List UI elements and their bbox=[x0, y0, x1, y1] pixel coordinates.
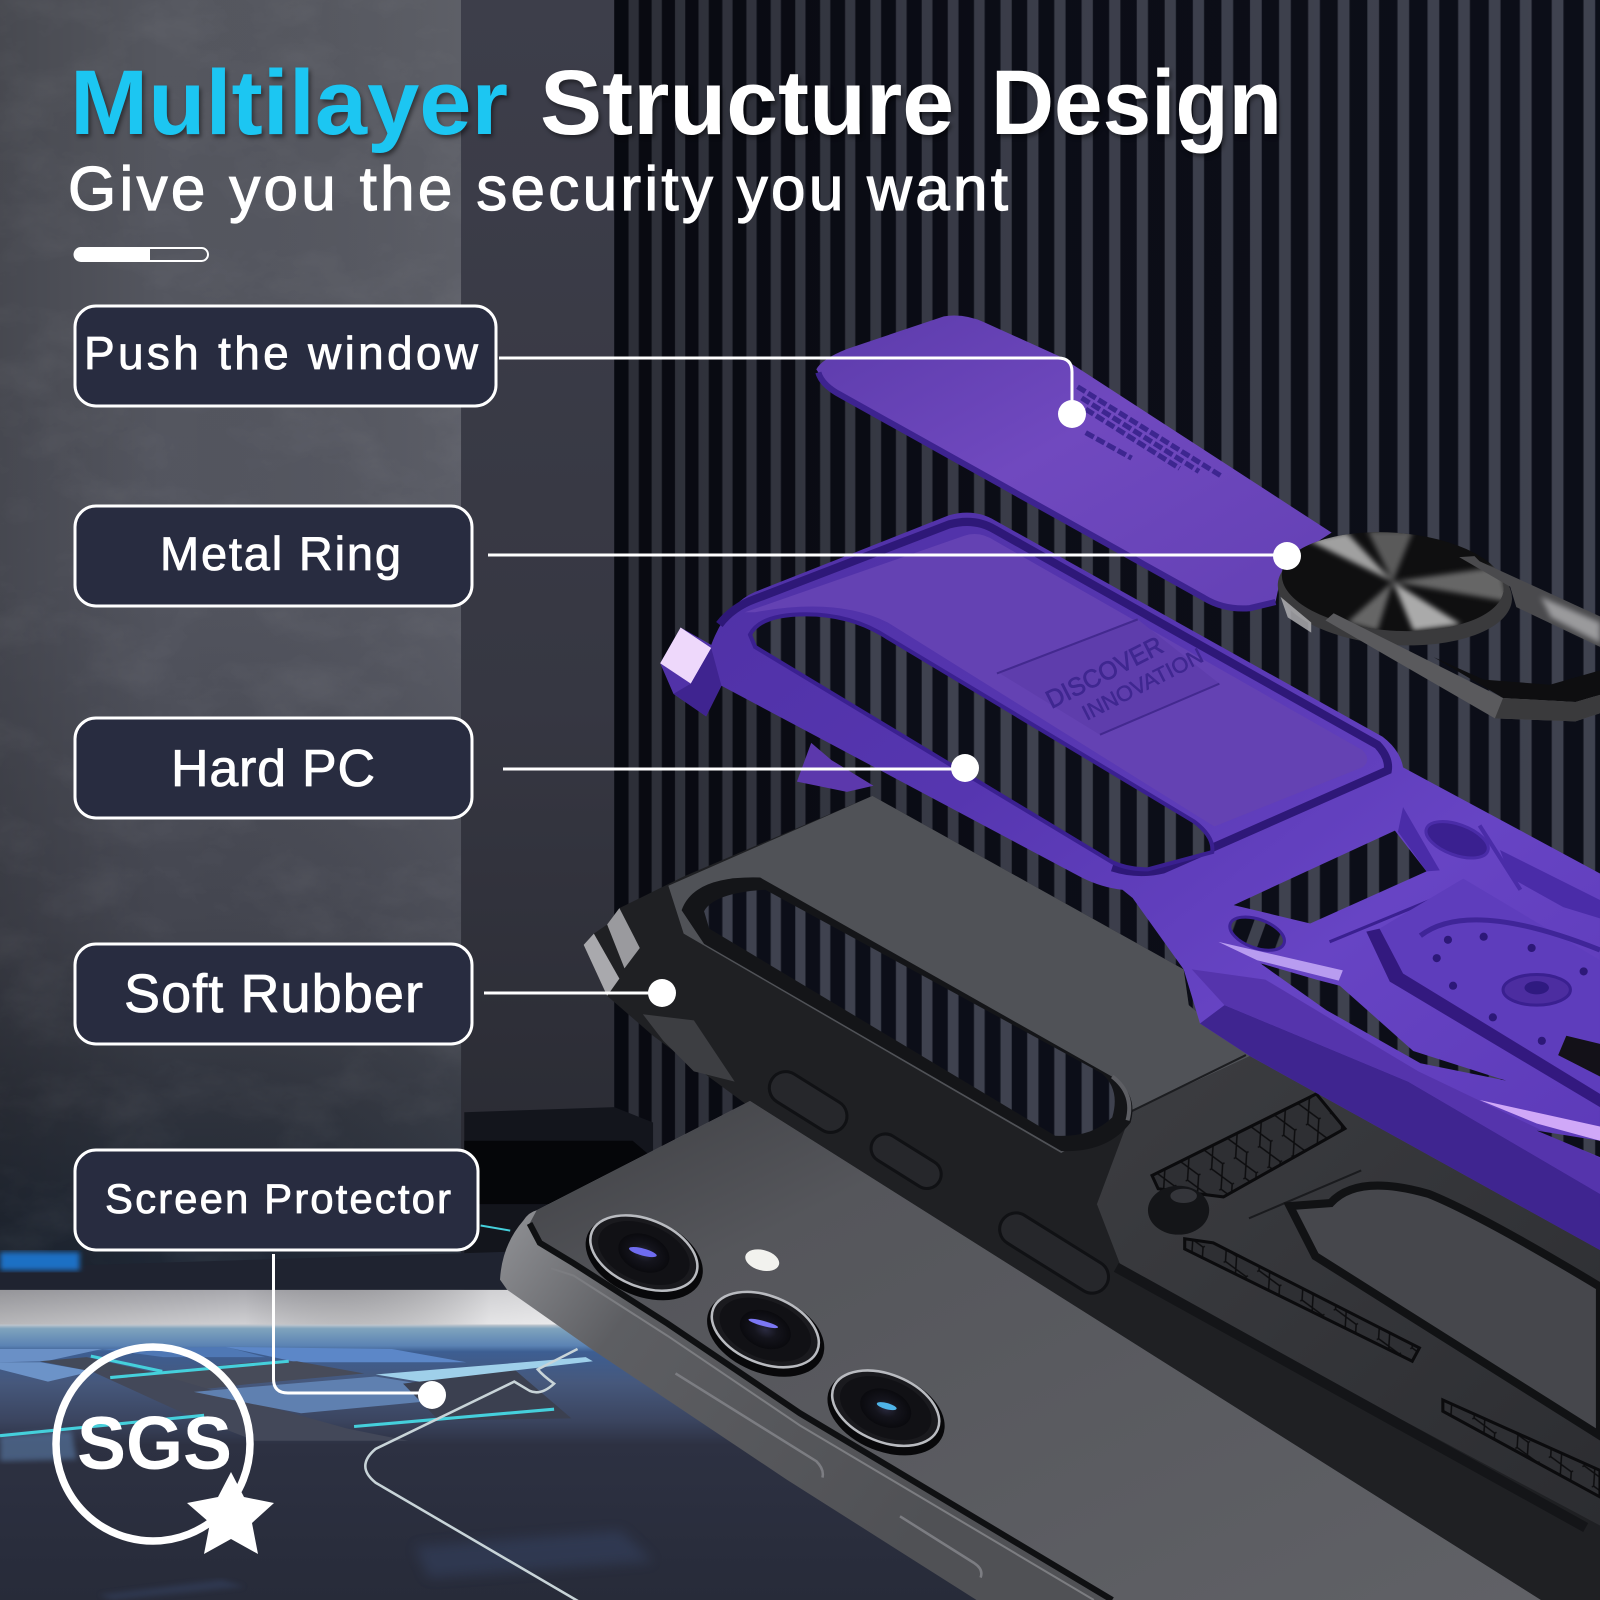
ring holder recess bbox=[1290, 1186, 1600, 1436]
light edge highlights bbox=[1218, 942, 1343, 981]
callout: hard PC bbox=[75, 718, 979, 818]
background: reflective floor bbox=[0, 1226, 1600, 1600]
callout: push the window bbox=[75, 306, 1086, 428]
progress bar accent bbox=[74, 247, 208, 262]
icon: star bbox=[187, 1472, 274, 1554]
case side buttons bbox=[763, 1065, 1115, 1299]
frame inner panel bbox=[745, 534, 1367, 827]
purple sliding window cover bbox=[816, 316, 1332, 611]
callout: soft rubber bbox=[75, 944, 676, 1044]
SGS certification badge: SGS bbox=[77, 1401, 232, 1485]
embossed case text: INNOVATION bbox=[1078, 644, 1207, 725]
metal ring holder bbox=[1274, 525, 1600, 721]
callout: metal ring bbox=[75, 506, 1301, 606]
body cutouts bbox=[1234, 831, 1427, 923]
purple hard PC layer bbox=[660, 513, 1600, 1250]
screen protector glass outline bbox=[365, 1349, 604, 1600]
camera lenses bbox=[573, 1199, 716, 1316]
title: Multilayer bbox=[70, 52, 508, 154]
callout: push the window: Push the window bbox=[84, 327, 479, 379]
callout: screen protector bbox=[75, 1150, 478, 1409]
honeycomb grip strips bbox=[1152, 1094, 1600, 1497]
phone with three cameras bbox=[500, 1101, 1541, 1600]
ridge bbox=[1116, 1267, 1586, 1528]
embossed case text bbox=[1041, 617, 1207, 737]
title bbox=[70, 52, 1282, 154]
flash bbox=[743, 1246, 782, 1275]
grip texture bbox=[1078, 387, 1220, 476]
callout: metal ring: Metal Ring bbox=[160, 527, 401, 580]
title: Structure bbox=[540, 52, 954, 154]
SGS certification badge bbox=[56, 1347, 274, 1554]
frame camera window bbox=[750, 614, 1212, 869]
callout: screen protector: Screen Protector bbox=[105, 1175, 451, 1222]
case window opening bbox=[682, 877, 1132, 1151]
callout: hard PC: Hard PC bbox=[171, 740, 375, 798]
callout: soft rubber: Soft Rubber bbox=[124, 964, 423, 1024]
embossed case text: DISCOVER bbox=[1041, 631, 1168, 714]
hexagon ring mount bbox=[1380, 879, 1600, 1094]
title: Design bbox=[991, 52, 1282, 154]
subtitle: Give you the security you want bbox=[68, 155, 1008, 224]
black soft rubber case layer bbox=[584, 796, 1600, 1600]
